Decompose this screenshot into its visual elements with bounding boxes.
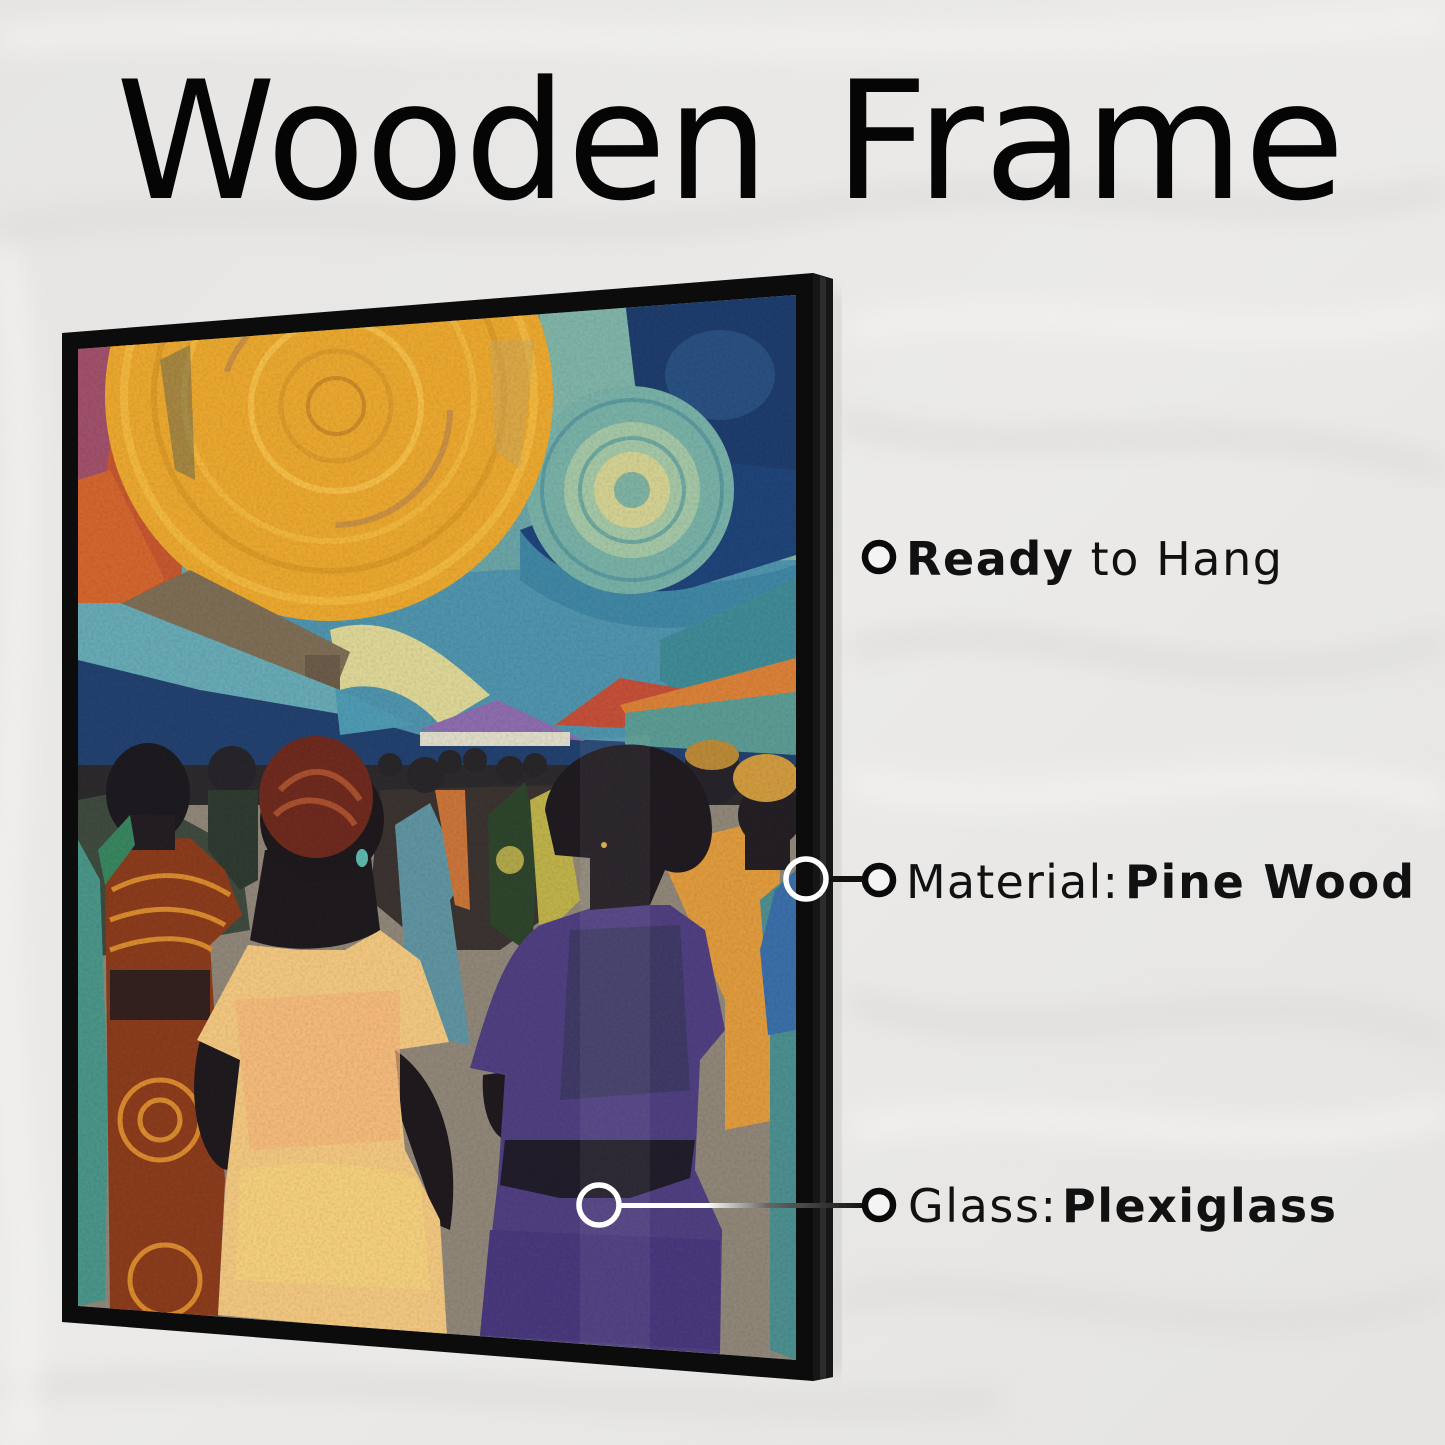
painting: market scene xyxy=(78,295,796,1360)
teal-dressed figure xyxy=(395,757,470,1045)
small swirl circle xyxy=(526,386,734,594)
title xyxy=(116,46,1345,237)
red roof xyxy=(555,678,690,728)
right edge figure xyxy=(733,754,802,1360)
right woman in purple dress xyxy=(470,744,725,1354)
callout: material pine wood: Material: xyxy=(906,855,1118,909)
red left sky xyxy=(78,340,190,620)
title: Frame xyxy=(834,46,1345,237)
sky swirls xyxy=(278,295,796,742)
orange figure left of back xyxy=(435,790,470,910)
left teal awning xyxy=(78,603,340,714)
dark market band xyxy=(78,660,796,765)
orange-dressed right figure xyxy=(665,740,780,1130)
callout: material pine wood: Pine Wood xyxy=(1125,855,1414,909)
purple umbrella xyxy=(418,700,585,741)
frame shadow xyxy=(833,285,841,1381)
title: Wooden xyxy=(116,46,769,237)
upper-right green building xyxy=(660,578,796,700)
callout: glass plexiglass: Plexiglass xyxy=(1062,1179,1336,1233)
orange roof xyxy=(620,658,796,713)
left-edge figure xyxy=(78,840,108,1306)
canvas brush texture xyxy=(70,285,805,1370)
big yellow sun xyxy=(105,314,553,621)
pale yellow ribbon in sky xyxy=(330,625,490,725)
left house xyxy=(121,570,350,677)
glass reflection xyxy=(580,735,650,1360)
ground xyxy=(78,790,796,1360)
background crowd xyxy=(78,746,796,960)
wooden frame xyxy=(62,273,833,1381)
center woman in cream dress xyxy=(194,736,453,1336)
callout: ready to hang: Ready to Hang xyxy=(906,532,1282,586)
green patterned figure xyxy=(488,756,538,955)
yellow-green figure xyxy=(530,790,580,926)
left woman in brick dress xyxy=(98,743,242,1316)
large navy circle xyxy=(520,290,796,591)
callout: glass plexiglass: Glass: xyxy=(908,1179,1056,1233)
callout: glass plexiglass xyxy=(579,1179,1336,1233)
callout: material pine wood xyxy=(786,855,1414,909)
